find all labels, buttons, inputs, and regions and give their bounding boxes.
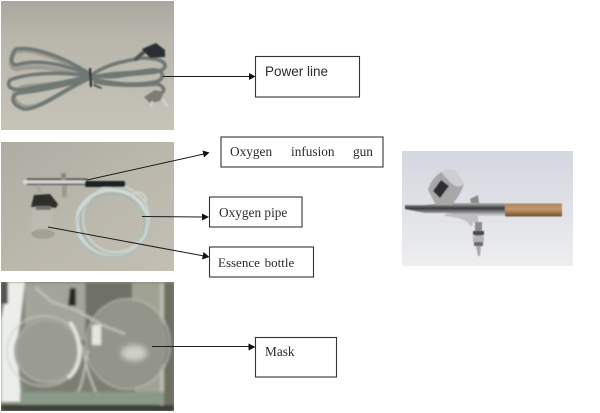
clear oxygen pipe coil xyxy=(76,186,149,258)
label: Oxygen infusion gun: gun xyxy=(353,144,373,159)
label: Oxygen pipe: Oxygen pipe xyxy=(219,205,287,220)
gun body xyxy=(23,180,85,184)
label: Mask: Mask xyxy=(265,344,295,359)
arrow: mask xyxy=(152,344,256,350)
trigger xyxy=(470,195,479,203)
copper handle xyxy=(505,204,562,216)
lower valve xyxy=(445,214,478,226)
label: Oxygen infusion gun: Oxygen xyxy=(230,144,272,159)
photo: mask xyxy=(1,282,174,411)
label: Oxygen infusion gun xyxy=(221,137,383,167)
label: Power line xyxy=(256,56,360,97)
label: Essence bottle xyxy=(210,247,314,277)
photo: power line cable xyxy=(1,1,174,130)
paint cup xyxy=(428,170,464,205)
chrome barrel xyxy=(405,203,505,216)
arrow: power line xyxy=(163,73,256,80)
photo: oxygen gun with pipe and essence bottle xyxy=(1,142,174,271)
label: Mask xyxy=(256,338,336,377)
label: Oxygen pipe xyxy=(210,197,302,227)
arrow: oxygen pipe xyxy=(142,214,209,220)
photo: oxygen infusion gun close-up xyxy=(402,151,573,266)
label: Essence bottle: Essence bottle xyxy=(218,255,294,270)
label: Oxygen infusion gun: infusion xyxy=(291,144,335,159)
essence bottle xyxy=(31,194,58,208)
label: Power line: Power line xyxy=(265,64,328,79)
arrow: essence bottle xyxy=(48,227,210,260)
arrow: oxygen infusion gun xyxy=(87,150,210,180)
